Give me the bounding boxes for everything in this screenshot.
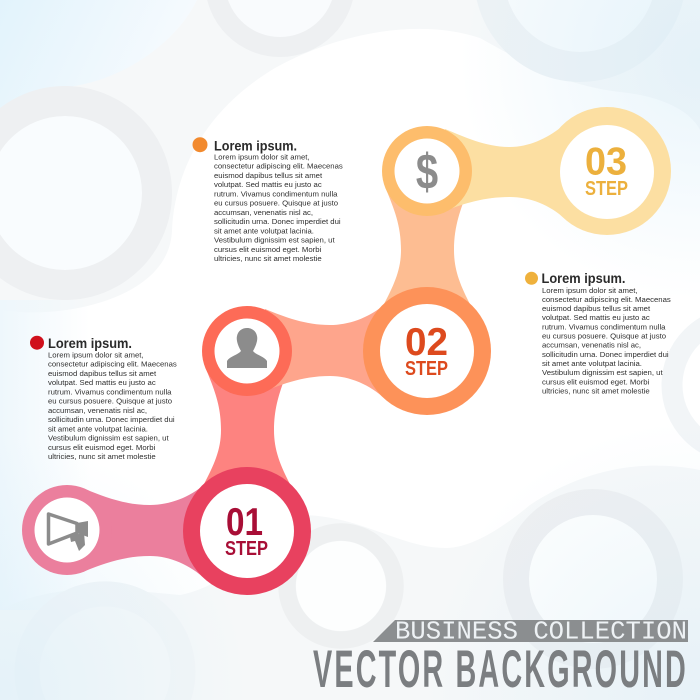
text block: step 02: euismod dapibus tellus sit amet: [214, 171, 323, 180]
text block: step 03: eu cursus posuere. Quisque at justo: [542, 332, 666, 340]
connector: $ to step 03: [445, 124, 565, 219]
title banner: [313, 618, 688, 699]
text block: step 03: accumsan, venenatis nisl ac,: [542, 341, 641, 350]
text block: step 03: sit amet ante volutpat lacinia.: [542, 359, 642, 368]
text block: step 02: ultricies, nunc sit amet molestie: [214, 254, 322, 263]
step 01 group: [22, 369, 311, 595]
text block: step 03: rutrum. Vivamus condimentum nulla: [542, 322, 666, 331]
text block: step 01: volutpat. Sed mattis eu justo ac: [48, 378, 156, 387]
node: step 03: [543, 107, 671, 235]
text block: step 01: Vestibulum dignissim est sapien, ut: [48, 434, 169, 443]
connector: megaphone to step 01: [85, 484, 205, 579]
text block: step 01: consectetur adipiscing elit. Maecenas: [48, 360, 177, 369]
text block: step 03: cursus elit euismod eget. Morbi: [542, 377, 650, 386]
text block: step 01: Lorem ipsum dolor sit amet,: [48, 350, 144, 360]
text block: step 01: accumsan, venenatis nisl ac,: [48, 406, 147, 415]
node: step 03: STEP: [585, 178, 628, 200]
text block: step 02: volutpat. Sed mattis eu justo ac: [214, 180, 322, 189]
connector: $ to step 02: [383, 189, 471, 306]
text block: step 03: Lorem ipsum.: [542, 270, 626, 286]
node: step 02: STEP: [405, 358, 448, 380]
icon node: dollar: $: [416, 144, 438, 200]
text block: step 02: Lorem ipsum dolor sit amet,: [214, 152, 310, 162]
text block: step 02: sit amet ante volutpat lacinia.: [214, 226, 314, 236]
text block: step 02: rutrum. Vivamus condimentum nulla: [214, 190, 338, 198]
subtitle band: BUSINESS COLLECTION: [395, 618, 687, 646]
text block: step 03: Vestibulum dignissim est sapien, ut: [542, 368, 663, 377]
connector: person to step 02: [265, 304, 385, 399]
node: step 02: [363, 287, 491, 415]
text block: step 03: [525, 270, 671, 395]
text block: step 01: eu cursus posuere. Quisque at justo: [48, 397, 172, 406]
text block: step 03: ultricies, nunc sit amet molestie: [542, 386, 650, 395]
step 03 group: [382, 107, 671, 235]
text block: step 03: sollicitudin urna. Donec imperdiet dui: [542, 350, 669, 359]
node: step 02: 02: [405, 321, 448, 364]
node: step 01: [183, 467, 311, 595]
text block: step 01: [30, 335, 177, 461]
text block: step 02: accumsan, venenatis nisl ac,: [214, 208, 313, 217]
icon node: person: [202, 306, 292, 396]
icon node: megaphone: [22, 485, 112, 575]
text block: step 03: euismod dapibus tellus sit amet: [542, 304, 651, 313]
node: step 01: STEP: [225, 538, 268, 560]
icon node: dollar: [382, 126, 472, 216]
node: step 03: 03: [585, 140, 627, 184]
node: step 01: 01: [226, 501, 263, 544]
text block: step 02: sollicitudin urna. Donec imperdiet dui: [214, 217, 341, 226]
text block: step 02: eu cursus posuere. Quisque at justo: [214, 199, 338, 208]
text block: step 01: Lorem ipsum.: [48, 335, 132, 351]
text block: step 01: rutrum. Vivamus condimentum nulla: [48, 388, 172, 396]
text block: step 02: cursus elit euismod eget. Morbi: [214, 245, 322, 254]
text block: step 01: cursus elit euismod eget. Morbi: [48, 443, 156, 452]
text block: step 03: Lorem ipsum dolor sit amet,: [542, 286, 638, 295]
text block: step 02: consectetur adipiscing elit. Maecenas: [214, 162, 343, 171]
text block: step 01: euismod dapibus tellus sit amet: [48, 369, 157, 378]
text block: step 02: Lorem ipsum.: [214, 138, 297, 154]
step 02 group: [202, 189, 491, 415]
text block: step 02: [192, 137, 343, 263]
text block: step 01: sit amet ante volutpat lacinia.: [48, 424, 148, 434]
connector: step 01 to person: [203, 369, 291, 486]
text block: step 01: ultricies, nunc sit amet molestie: [48, 452, 156, 461]
text block: step 03: volutpat. Sed mattis eu justo ac: [542, 313, 650, 322]
text block: step 01: sollicitudin urna. Donec imperdiet dui: [48, 415, 175, 424]
text block: step 03: consectetur adipiscing elit. Maecenas: [542, 295, 671, 304]
text block: step 02: Vestibulum dignissim est sapien, ut: [214, 236, 335, 245]
